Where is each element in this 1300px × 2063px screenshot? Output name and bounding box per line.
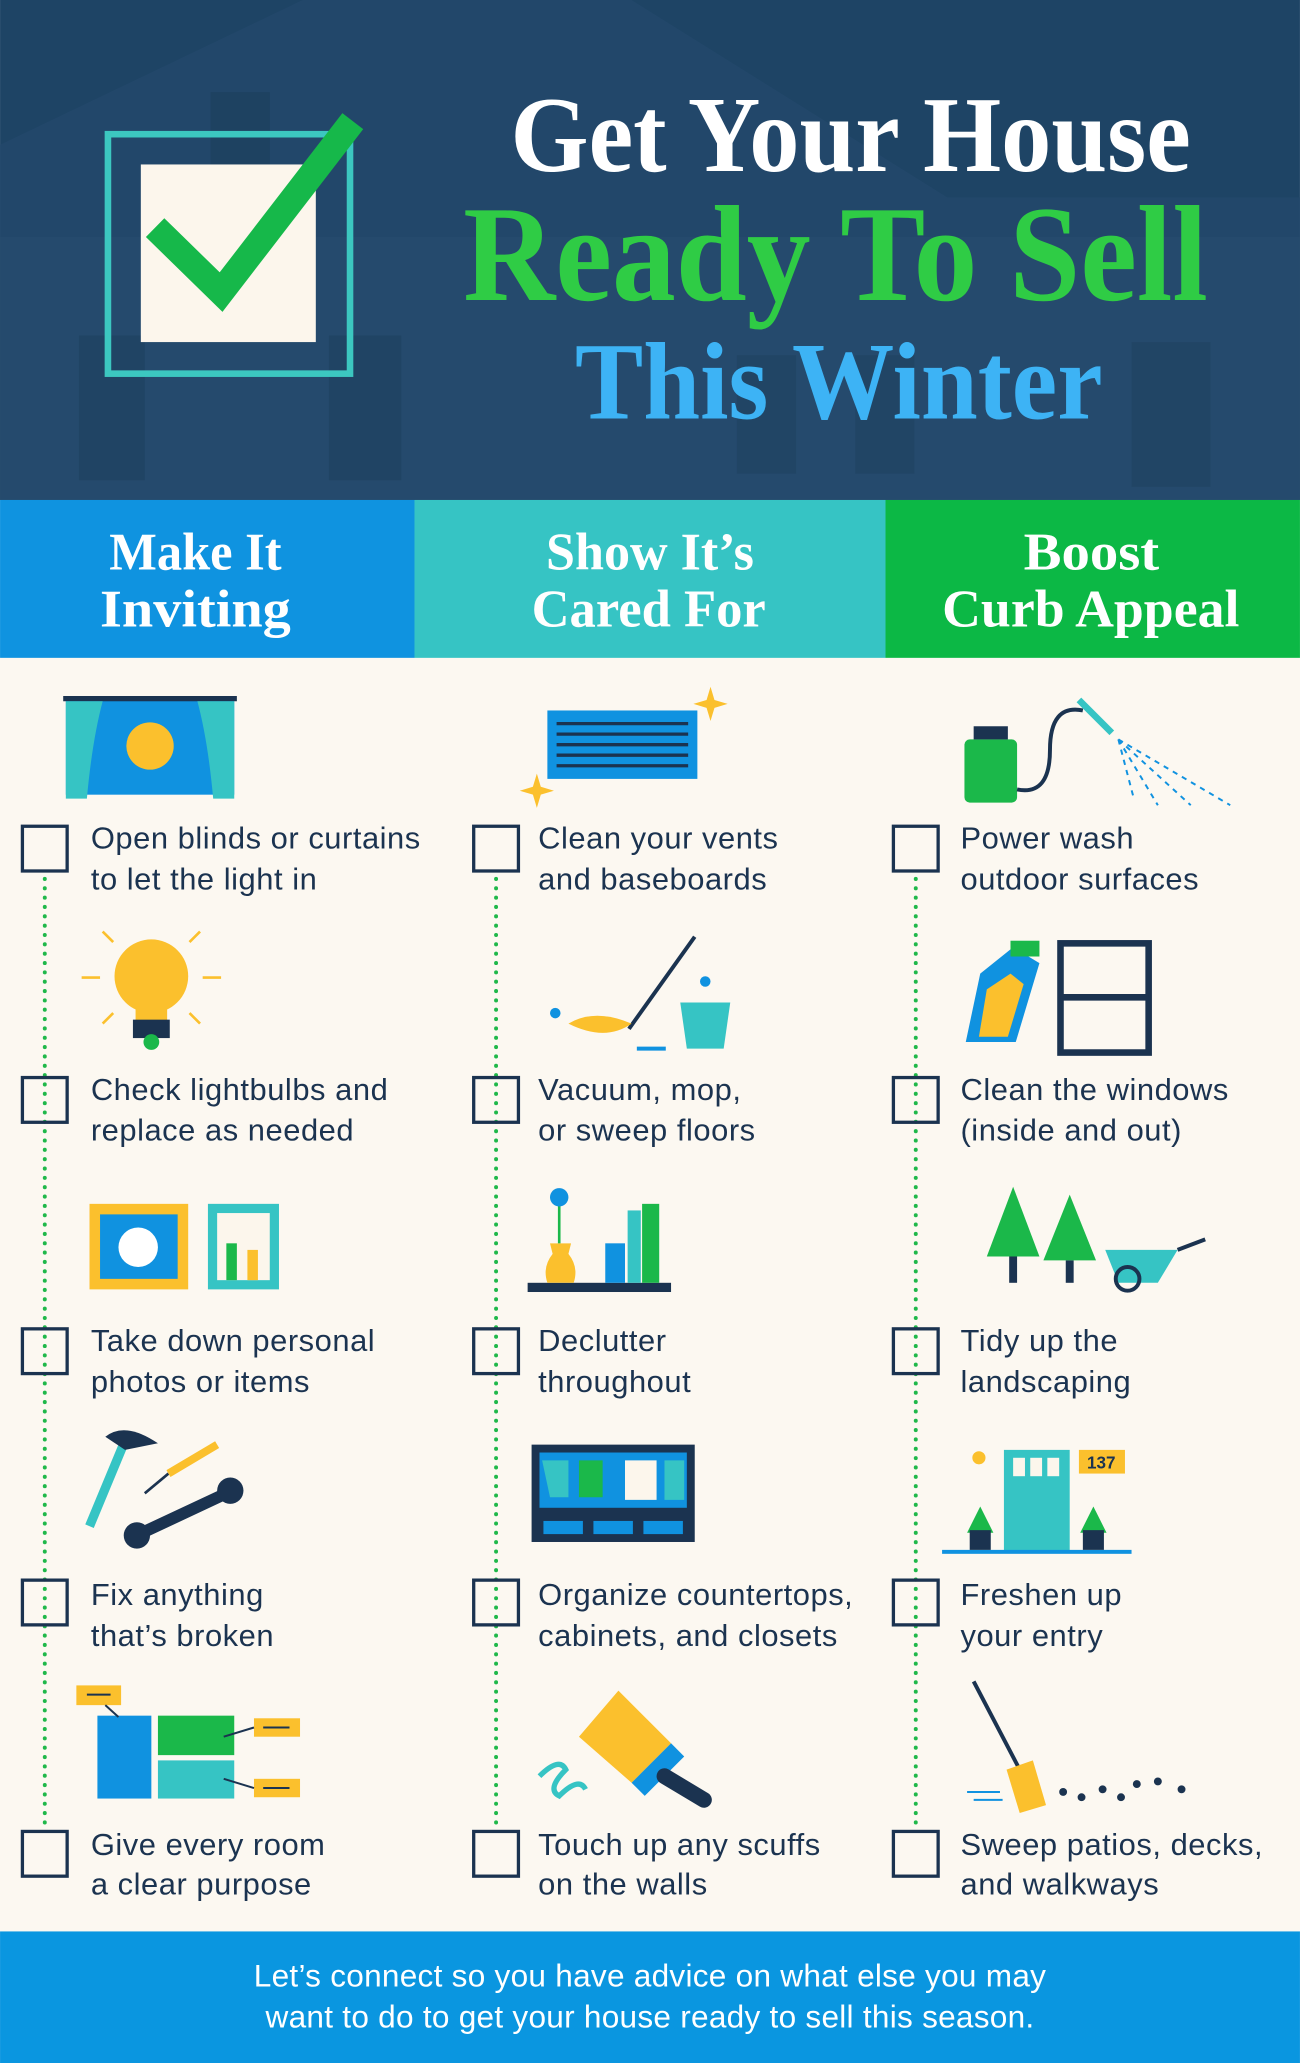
title: This Winter xyxy=(575,320,1103,442)
column header: Show It's Cared For: Cared For xyxy=(532,580,766,638)
icon: front entry: 137 xyxy=(1087,1453,1116,1472)
text: column 1 items: Take down personal xyxy=(91,1323,375,1358)
column header: Make It Inviting xyxy=(0,500,414,658)
column header: Boost Curb Appeal: Curb Appeal xyxy=(942,580,1239,638)
icon: front entry xyxy=(942,1450,1132,1554)
text: column 1 items: photos or items xyxy=(91,1364,310,1399)
text: column 2 items: Clean your vents xyxy=(538,821,779,856)
text: column 3 items: Freshen up xyxy=(961,1577,1122,1612)
icon: big checkbox xyxy=(108,132,350,374)
column header: Boost Curb Appeal: Boost xyxy=(1024,524,1160,582)
text: column 2 items: Declutter xyxy=(538,1323,667,1358)
title xyxy=(463,76,1208,442)
text: column 1 items: Fix anything xyxy=(91,1577,264,1612)
icon: tools xyxy=(90,1430,243,1549)
text: column 2 items: Vacuum, mop, xyxy=(538,1072,741,1107)
icon: paint brush xyxy=(539,1691,704,1800)
text: column 3 items: Power wash xyxy=(961,821,1134,856)
title: Ready To Sell xyxy=(463,178,1208,330)
text: column 2 items: cabinets, and closets xyxy=(538,1618,838,1653)
icon: trees and wheelbarrow xyxy=(987,1187,1205,1291)
text: column 3 items: Tidy up the xyxy=(961,1323,1118,1358)
checkboxes xyxy=(22,826,938,1876)
dotted progress lines xyxy=(45,879,916,1831)
text: column 1 items: Check lightbulbs and xyxy=(91,1072,388,1107)
text: column 1 items xyxy=(91,821,421,1902)
text: column 2 items: Touch up any scuffs xyxy=(538,1827,821,1862)
text: column 1 items: that’s broken xyxy=(91,1618,274,1653)
icon: pressure washer xyxy=(964,700,1230,805)
footer: want to do to get your house ready to sell this season. xyxy=(265,1998,1034,2034)
icon: broom xyxy=(967,1681,1185,1813)
icon: room plan xyxy=(76,1685,300,1799)
icon: window with curtains xyxy=(63,696,237,799)
column header: Show It's Cared For: Show It’s xyxy=(546,524,754,582)
text: column 2 items: throughout xyxy=(538,1364,691,1399)
text: column 2 items: or sweep floors xyxy=(538,1113,756,1148)
footer xyxy=(0,1931,1300,2063)
icon: shelf with vase and books xyxy=(528,1188,671,1292)
text: column 1 items: replace as needed xyxy=(91,1113,354,1148)
column header: Make It Inviting: Inviting xyxy=(100,580,291,638)
column header: Show It's Cared For xyxy=(414,500,886,658)
text: column 1 items: Open blinds or curtains xyxy=(91,821,421,856)
text: column 2 items: on the walls xyxy=(538,1867,708,1902)
header background xyxy=(0,0,1300,500)
text: column 1 items: a clear purpose xyxy=(91,1867,312,1902)
text: column 3 items: and walkways xyxy=(961,1867,1159,1902)
text: column 1 items: to let the light in xyxy=(91,861,317,896)
icon: lightbulb xyxy=(82,932,221,1050)
text: column 3 items: your entry xyxy=(961,1618,1103,1653)
icon: mop and bucket xyxy=(550,937,730,1049)
icon: photo frames xyxy=(90,1204,279,1289)
column header: Make It Inviting: Make It xyxy=(109,524,282,582)
footer: Let’s connect so you have advice on what else you may xyxy=(254,1958,1046,1994)
text: column 1 items: Give every room xyxy=(91,1827,325,1862)
text: column 2 items xyxy=(538,821,853,1902)
text: column 3 items: Sweep patios, decks, xyxy=(961,1827,1263,1862)
icon: closet xyxy=(532,1445,695,1542)
text: column 2 items: Organize countertops, xyxy=(538,1577,853,1612)
title: Get Your House xyxy=(511,76,1191,195)
icon: spray bottle and window xyxy=(966,941,1149,1053)
text: column 3 items: (inside and out) xyxy=(961,1113,1182,1148)
text: column 3 items: Clean the windows xyxy=(961,1072,1229,1107)
column header: Boost Curb Appeal xyxy=(886,500,1300,658)
text: column 3 items xyxy=(961,821,1263,1902)
text: column 2 items: and baseboards xyxy=(538,861,767,896)
icon: vent xyxy=(520,687,728,808)
text: column 3 items: landscaping xyxy=(961,1364,1131,1399)
text: column 3 items: outdoor surfaces xyxy=(961,861,1199,896)
